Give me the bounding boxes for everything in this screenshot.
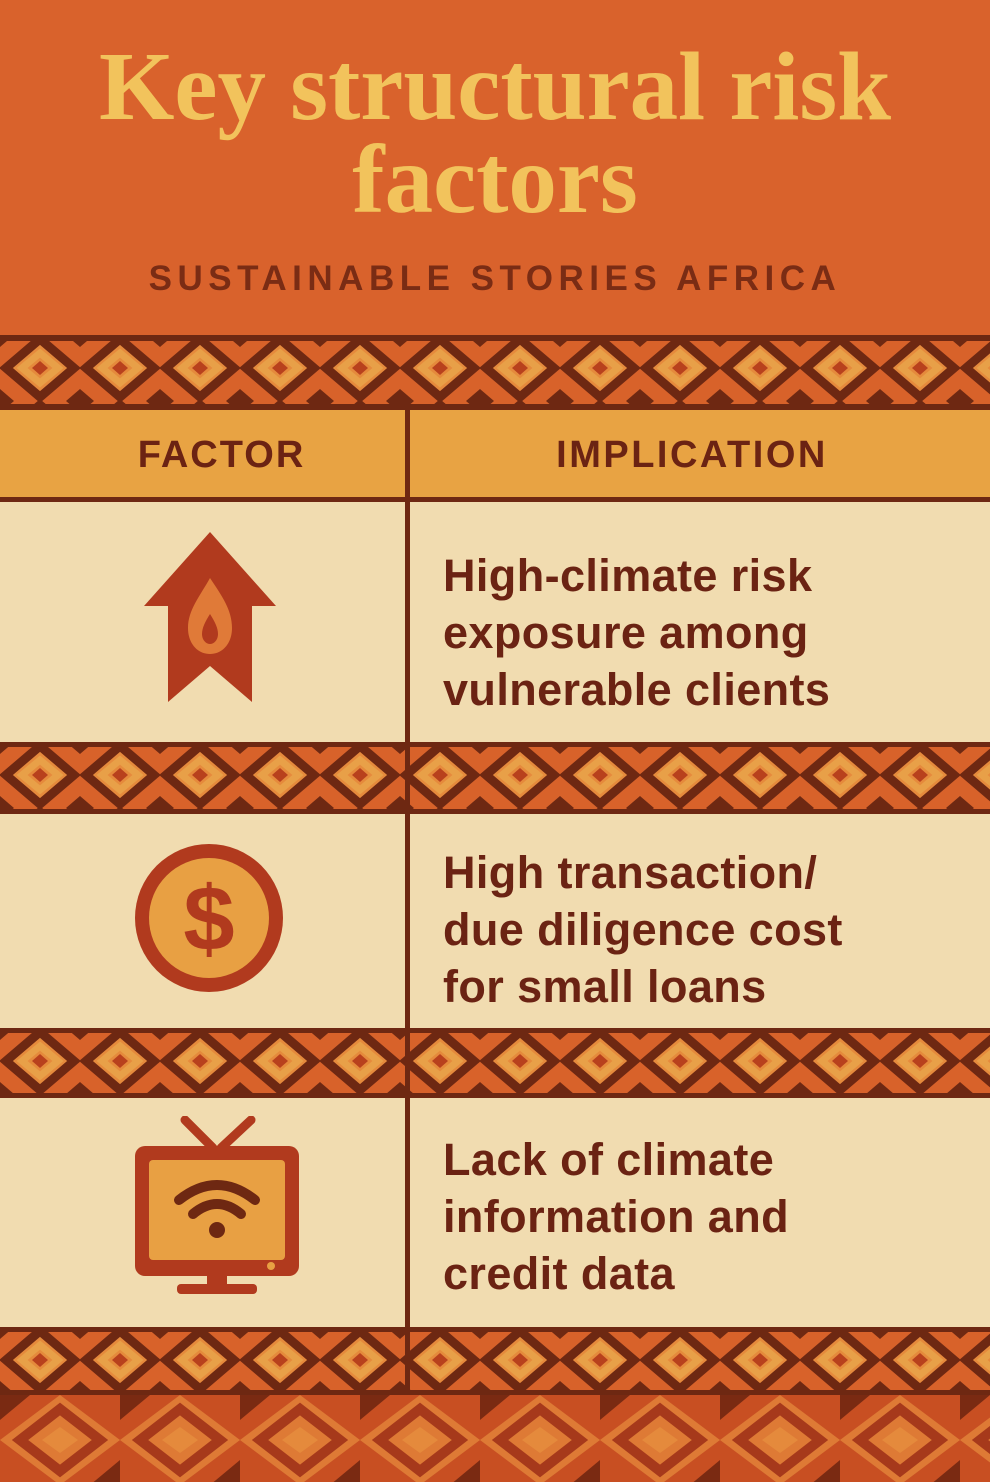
icon: dollar coin (135, 844, 283, 992)
implication text 2: due diligence cost (443, 904, 843, 955)
bottom pattern (0, 1395, 990, 1482)
title (99, 33, 891, 233)
icon: tv with wifi (135, 1116, 299, 1294)
pattern band top (0, 335, 990, 410)
implication text 3 (443, 1134, 789, 1299)
row 1 (0, 502, 990, 742)
implication text 1: High-climate risk (443, 550, 812, 601)
title: Key structural risk (99, 33, 891, 140)
row 3 (0, 1098, 990, 1328)
implication text 2: for small loans (443, 961, 767, 1012)
implication text 3: Lack of climate (443, 1134, 774, 1185)
header panel (0, 0, 990, 336)
pattern band 4 (0, 1327, 990, 1395)
row 2 (0, 814, 990, 1028)
implication text 3: credit data (443, 1248, 675, 1299)
icon: arrow with flame (144, 532, 276, 702)
column heading: factor: FACTOR (138, 434, 305, 476)
implication text 1 (443, 550, 830, 715)
title: factors (352, 126, 638, 233)
pattern band 3 (0, 1028, 990, 1098)
column heading: implication: IMPLICATION (556, 434, 828, 476)
implication text 2 (443, 847, 843, 1012)
implication text 3: information and (443, 1191, 789, 1242)
implication text 2: High transaction/ (443, 847, 817, 898)
subtitle: SUSTAINABLE STORIES AFRICA (149, 259, 841, 298)
pattern band 2 (0, 742, 990, 814)
table header row (0, 410, 990, 498)
implication text 1: vulnerable clients (443, 664, 830, 715)
column divider (405, 410, 410, 1395)
icon: dollar coin: $ (183, 868, 235, 970)
implication text 1: exposure among (443, 607, 809, 658)
